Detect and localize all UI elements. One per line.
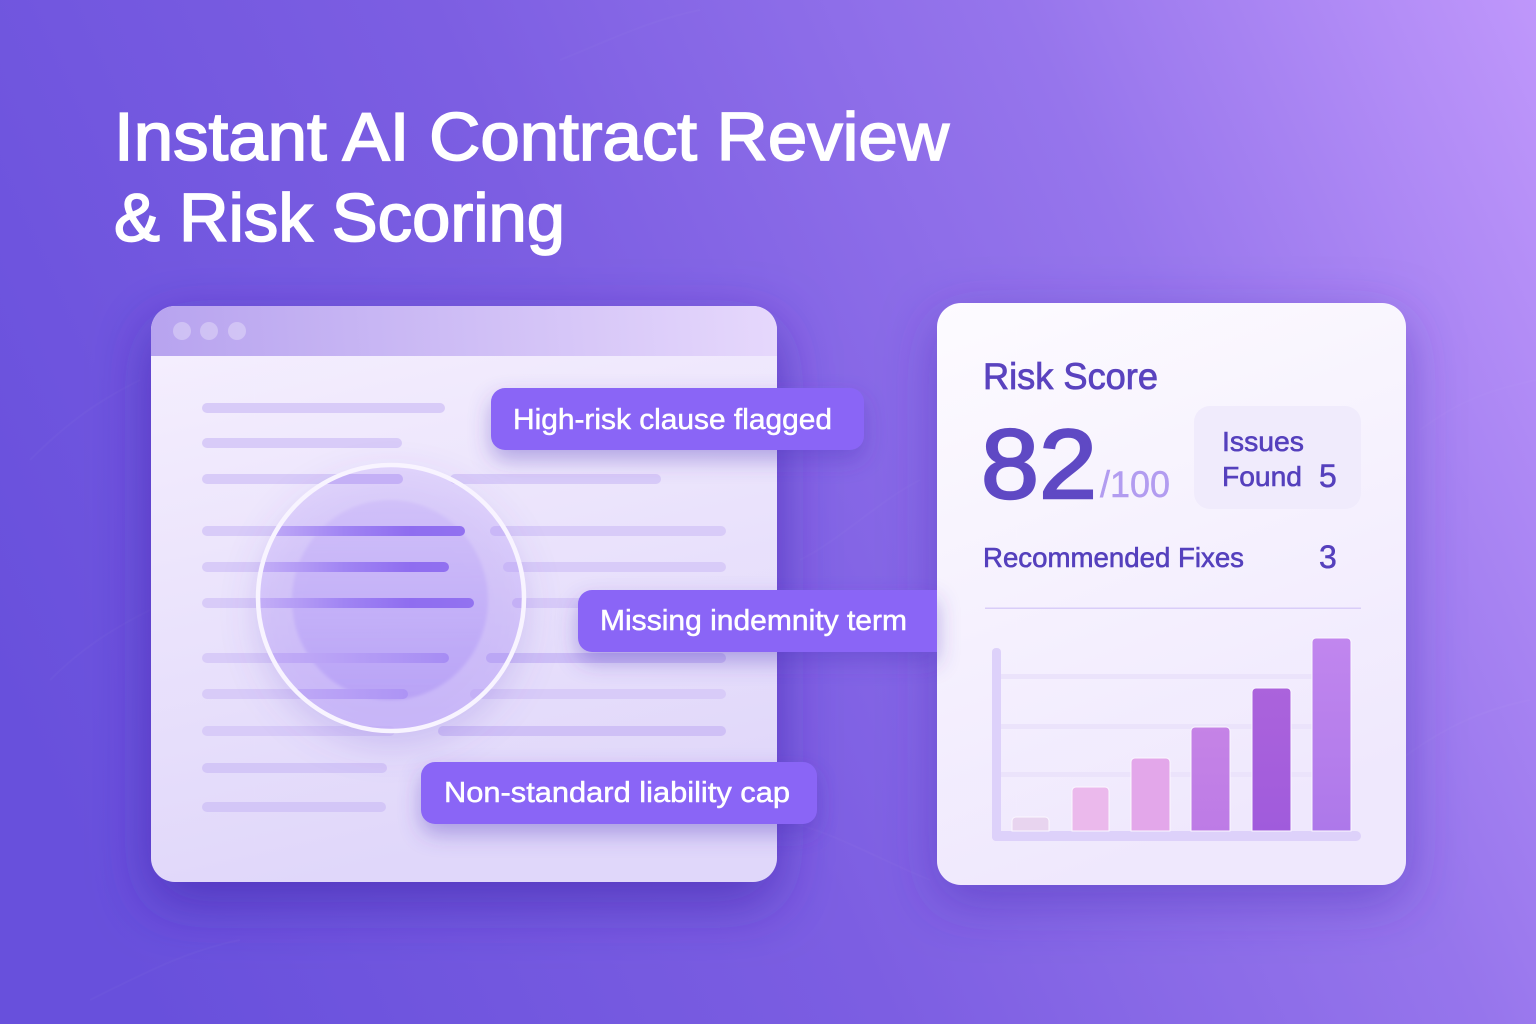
issues found box: 5 (1319, 458, 1337, 494)
callout: non-standard liability cap (421, 762, 817, 824)
window title bar (151, 306, 777, 356)
callout: high-risk clause flagged: High-risk clause flagged (513, 404, 832, 436)
callout: high-risk clause flagged (491, 388, 864, 450)
title: & Risk Scoring (114, 180, 565, 256)
score value (981, 409, 1170, 519)
score value: 82 (981, 409, 1097, 519)
bar chart (992, 638, 1361, 841)
issues found box (1194, 406, 1361, 509)
icon: magnifying glass lens (248, 463, 534, 755)
title: Instant AI Contract Review (114, 99, 950, 175)
panel: contract document window (151, 306, 777, 882)
callout: non-standard liability cap: Non-standard liability cap (444, 777, 790, 809)
callout: missing indemnity term (578, 590, 937, 652)
recommended fixes: Recommended Fixes (983, 542, 1244, 573)
title (114, 99, 950, 256)
score value: /100 (1100, 464, 1170, 505)
bars (1012, 638, 1351, 831)
document text lines (202, 403, 726, 812)
magnified lines (260, 474, 522, 699)
panel: risk score card (937, 303, 1406, 885)
lens rim (258, 465, 524, 731)
heading: risk score: Risk Score (983, 356, 1158, 397)
window control dots (173, 322, 246, 340)
lens inner darker area (292, 500, 488, 700)
callout: missing indemnity term: Missing indemnity term (600, 605, 907, 637)
issues found box: Issues (1222, 426, 1304, 457)
recommended fixes (983, 539, 1337, 575)
issues found box: Found (1222, 461, 1302, 492)
chart axes (992, 648, 1361, 841)
recommended fixes: 3 (1319, 539, 1337, 575)
